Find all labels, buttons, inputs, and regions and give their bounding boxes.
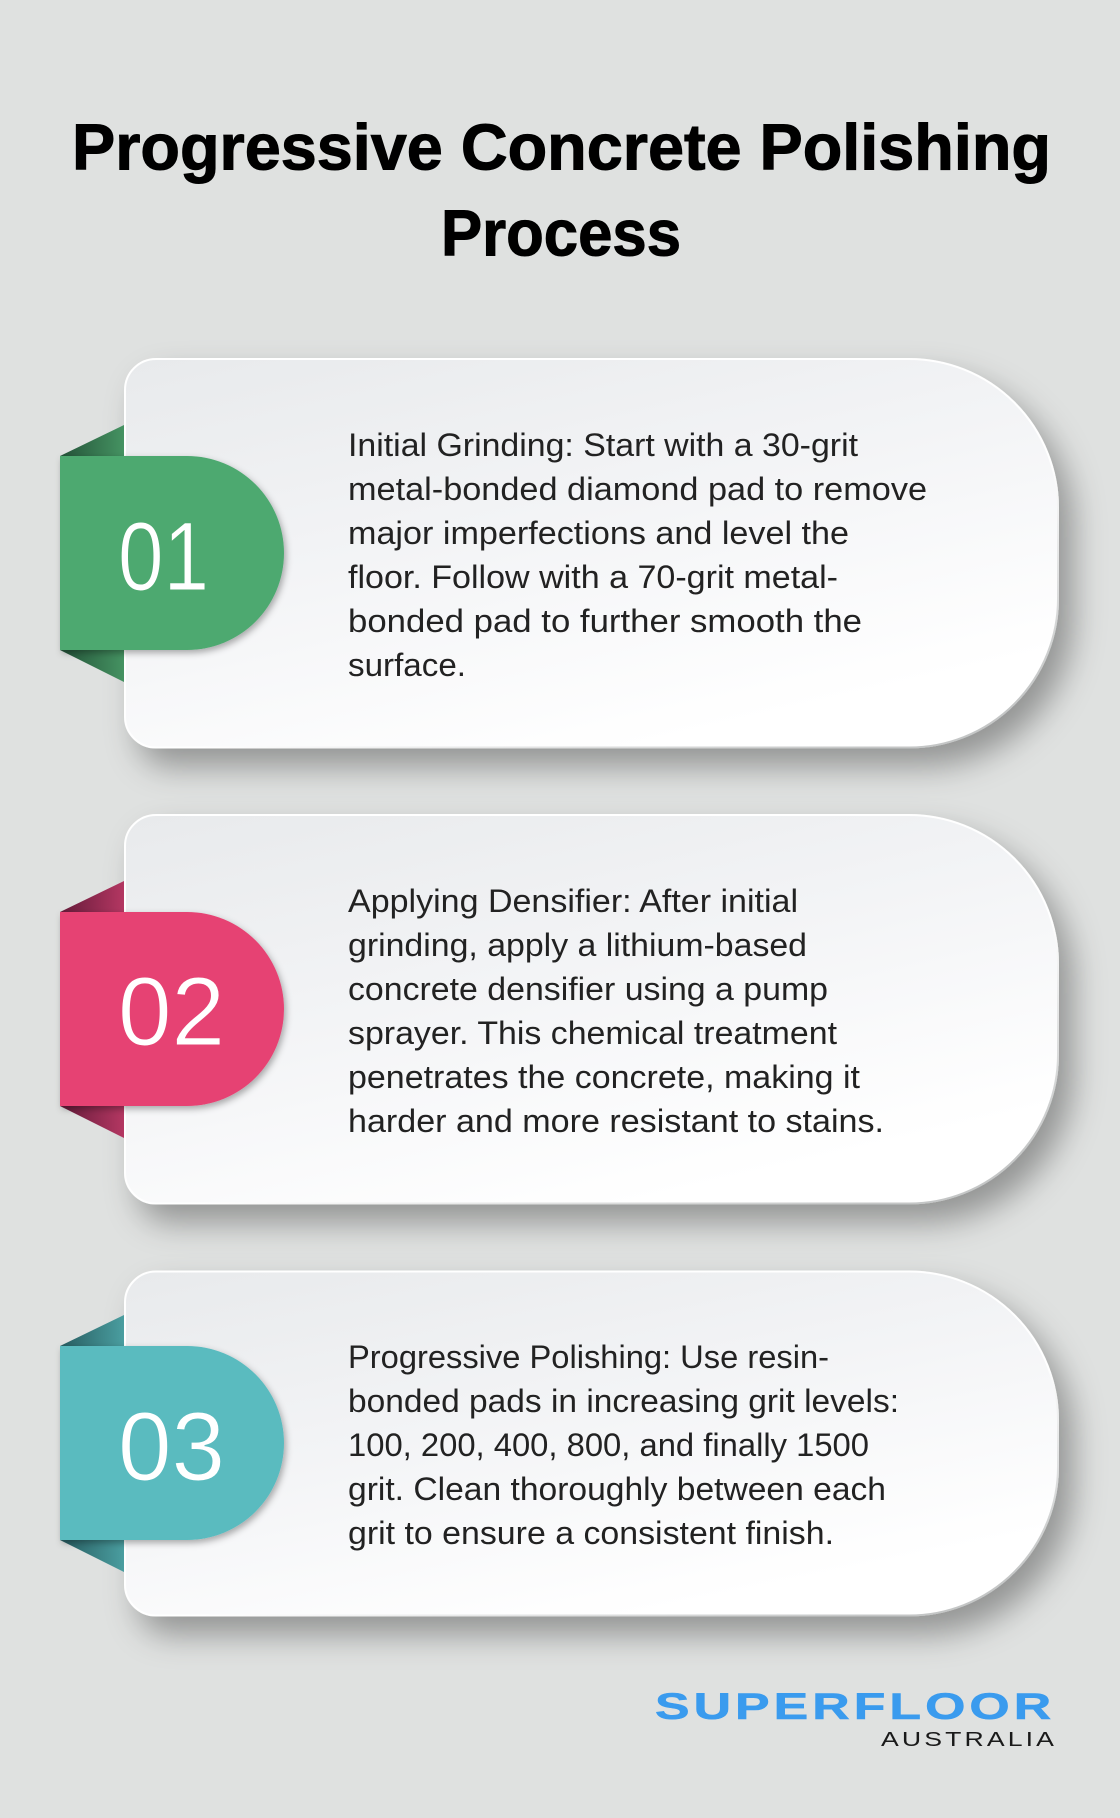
step 2 text: penetrates the concrete, making it bbox=[348, 1059, 860, 1095]
logo: Superfloor Australia: SUPERFLOOR bbox=[655, 1685, 1051, 1727]
step 3 text bbox=[348, 1339, 899, 1551]
step 2 text: concrete densifier using a pump bbox=[348, 971, 828, 1007]
step 1 number badge: 01 bbox=[118, 502, 209, 611]
card 2 background bbox=[125, 815, 1058, 1204]
step 1 text: Initial Grinding: Start with a 30-grit bbox=[348, 427, 858, 463]
step 3 number badge: 03 bbox=[118, 1392, 225, 1501]
step 2 ribbon folds bbox=[60, 881, 124, 1138]
title bbox=[72, 110, 1051, 270]
panel: step 3 bbox=[60, 1272, 1058, 1616]
card 1 background bbox=[125, 359, 1058, 748]
step 2 text bbox=[348, 883, 884, 1139]
card 3 background bbox=[125, 1272, 1058, 1616]
step 2 number badge bbox=[60, 912, 284, 1106]
panel: step 1 bbox=[60, 359, 1058, 748]
step 2 text: harder and more resistant to stains. bbox=[348, 1103, 884, 1139]
step 3 text: grit to ensure a consistent finish. bbox=[348, 1515, 834, 1551]
title: Progressive Concrete Polishing bbox=[72, 110, 1051, 184]
step 1 text: floor. Follow with a 70-grit metal- bbox=[348, 559, 838, 595]
step 1 text: major imperfections and level the bbox=[348, 515, 849, 551]
step 1 ribbon folds bbox=[60, 425, 124, 682]
logo: Superfloor Australia bbox=[655, 1685, 1054, 1751]
step 2 text: Applying Densifier: After initial bbox=[348, 883, 798, 919]
step 2 text: sprayer. This chemical treatment bbox=[348, 1015, 837, 1051]
step 1 text: bonded pad to further smooth the bbox=[348, 603, 862, 639]
panel: step 2 bbox=[60, 815, 1058, 1204]
step 2 text: grinding, apply a lithium-based bbox=[348, 927, 807, 963]
step 3 ribbon folds bbox=[60, 1315, 124, 1572]
step 3 text: 100, 200, 400, 800, and finally 1500 bbox=[348, 1427, 869, 1463]
step 1 number badge bbox=[60, 456, 284, 650]
step 3 number badge bbox=[60, 1346, 284, 1540]
logo: Superfloor Australia: AUSTRALIA bbox=[881, 1728, 1054, 1751]
step 1 text: surface. bbox=[348, 647, 466, 683]
title: Process bbox=[441, 196, 681, 270]
step 3 text: Progressive Polishing: Use resin- bbox=[348, 1339, 829, 1375]
step 2 number badge: 02 bbox=[118, 957, 225, 1066]
step 1 text bbox=[348, 427, 927, 683]
step 1 text: metal-bonded diamond pad to remove bbox=[348, 471, 927, 507]
step 3 text: grit. Clean thoroughly between each bbox=[348, 1471, 886, 1507]
step 3 text: bonded pads in increasing grit levels: bbox=[348, 1383, 899, 1419]
